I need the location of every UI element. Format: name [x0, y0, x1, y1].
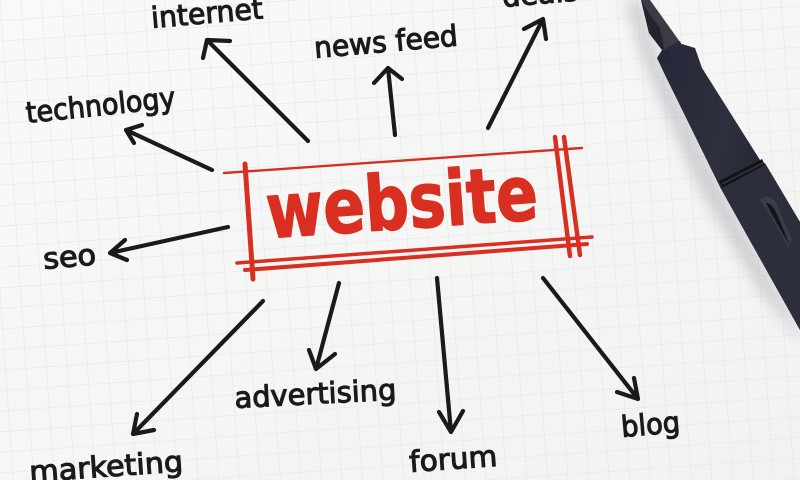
label: seo: seo [42, 237, 97, 276]
arrow: to technology [126, 125, 212, 170]
arrow: to news feed [374, 68, 402, 135]
label: blog: blog [620, 405, 681, 444]
arrow: to internet [203, 40, 308, 141]
arrow: to deals [488, 19, 546, 128]
label: technology: technology [24, 80, 177, 130]
arrow: to blog [543, 278, 638, 399]
arrow: to marketing [133, 301, 263, 434]
arrow: to seo [110, 227, 228, 260]
red rectangle frame [224, 137, 592, 279]
icon: fountain pen [641, 0, 800, 330]
title: website: website [263, 148, 541, 256]
label: news feed: news feed [313, 19, 459, 65]
label: advertising: advertising [234, 373, 397, 415]
pen shadow [625, 0, 800, 340]
arrow: to forum [437, 278, 463, 432]
arrow: to advertising [309, 283, 339, 369]
label: forum: forum [408, 439, 498, 479]
